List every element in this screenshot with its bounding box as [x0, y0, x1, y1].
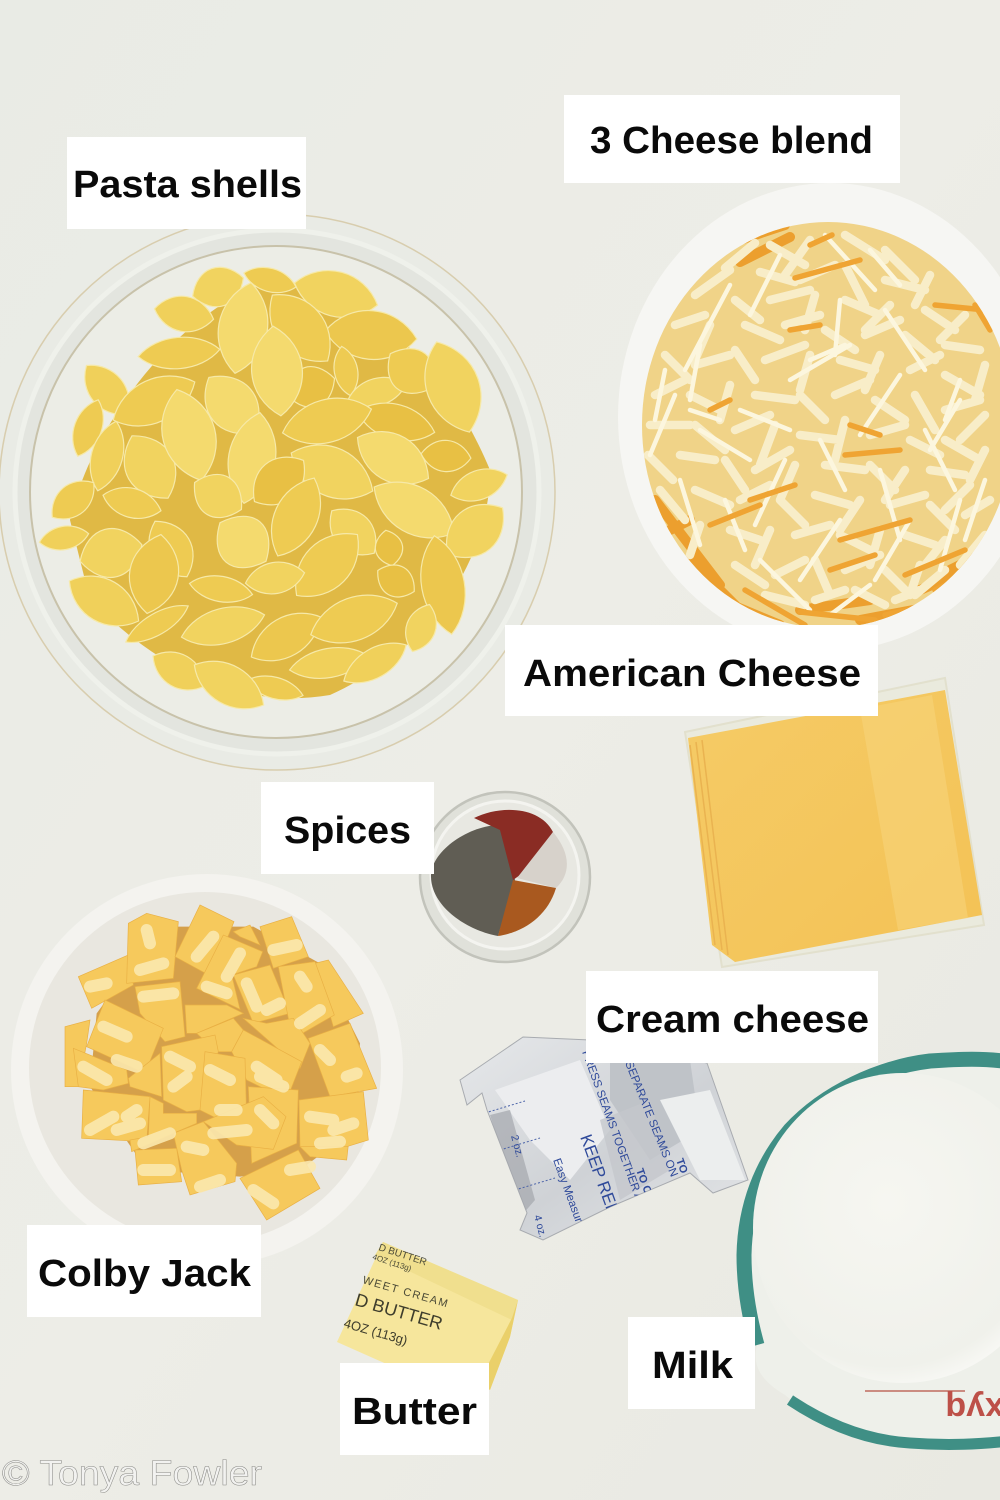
paprika: [474, 810, 553, 880]
pale cheese shreds, top layer: [650, 235, 985, 615]
Pyrex measuring cup of milk: [737, 1053, 1000, 1449]
label: Cream cheese: Cream cheese: [596, 999, 869, 1041]
cream cheese foil package: KEEP REFR: [576, 1132, 627, 1229]
cream cheese foil package: SEPARATE SEAMS ON TOP OF: [622, 1060, 697, 1221]
foil print: PRESS SEAMS TOGETHER AND: [579, 1049, 651, 1218]
cream cheese shreds: [648, 235, 990, 605]
salt: [517, 832, 567, 888]
cream cheese foil package: 4 oz.: [531, 1214, 549, 1239]
label: Spices: Spices: [284, 810, 411, 852]
stick of butter: [337, 1242, 518, 1390]
cream cheese foil package: Easy Measure: [550, 1157, 587, 1230]
milk surface: [753, 1073, 1000, 1383]
bowl of Colby Jack cubes: [11, 874, 403, 1266]
white bowl of shredded cheese: [618, 183, 1000, 651]
label: American Cheese: [505, 625, 878, 716]
cheese cubes: [65, 905, 377, 1220]
label: Pasta shells: Pasta shells: [73, 164, 302, 206]
glass cup body: [737, 1053, 1000, 1449]
cream cheese foil package: 2 oz.: [508, 1134, 526, 1159]
label: 3 Cheese blend: [564, 95, 900, 183]
stick of butter: D BUTTER: [377, 1242, 428, 1268]
stick of butter: 4OZ (113g): [342, 1315, 409, 1348]
label: Spices: [261, 782, 434, 874]
label: Colby Jack: Colby Jack: [38, 1253, 252, 1295]
label: Butter: [340, 1363, 489, 1455]
label: Pasta shells: [67, 137, 306, 229]
glass bowl of pasta shells: [0, 214, 555, 770]
watermark: © Tonya Fowler: [2, 1454, 262, 1493]
orange cheese shreds, top layer: [710, 235, 990, 625]
label: Milk: Milk: [652, 1345, 734, 1387]
label: Cream cheese: [586, 971, 878, 1063]
glass dish of spices: [420, 792, 590, 962]
label: 3 Cheese blend: 3 Cheese blend: [590, 120, 873, 162]
stick of butter: 4OZ (113g): [371, 1252, 413, 1273]
cream cheese foil package: TO CLOSE: [633, 1167, 664, 1224]
American cheese slices: [685, 678, 984, 967]
label: American Cheese: American Cheese: [523, 653, 861, 695]
label: Milk: [628, 1317, 755, 1409]
black pepper: [431, 825, 515, 936]
label: Colby Jack: [27, 1225, 261, 1317]
orange cheese shreds, lower layer: [650, 225, 1000, 625]
cream cheese foil package: TO OPEN: [673, 1157, 701, 1207]
stick of butter: WEET CREAM: [361, 1274, 450, 1311]
cream cheese foil package: [460, 1037, 748, 1240]
label: Butter: Butter: [352, 1391, 477, 1433]
stick of butter: D BUTTER: [353, 1290, 445, 1334]
teal rim: [744, 1059, 1000, 1345]
pasta shells pile: [37, 259, 518, 722]
chili powder: [498, 880, 556, 936]
cream marbling on cubes: [83, 930, 357, 1203]
